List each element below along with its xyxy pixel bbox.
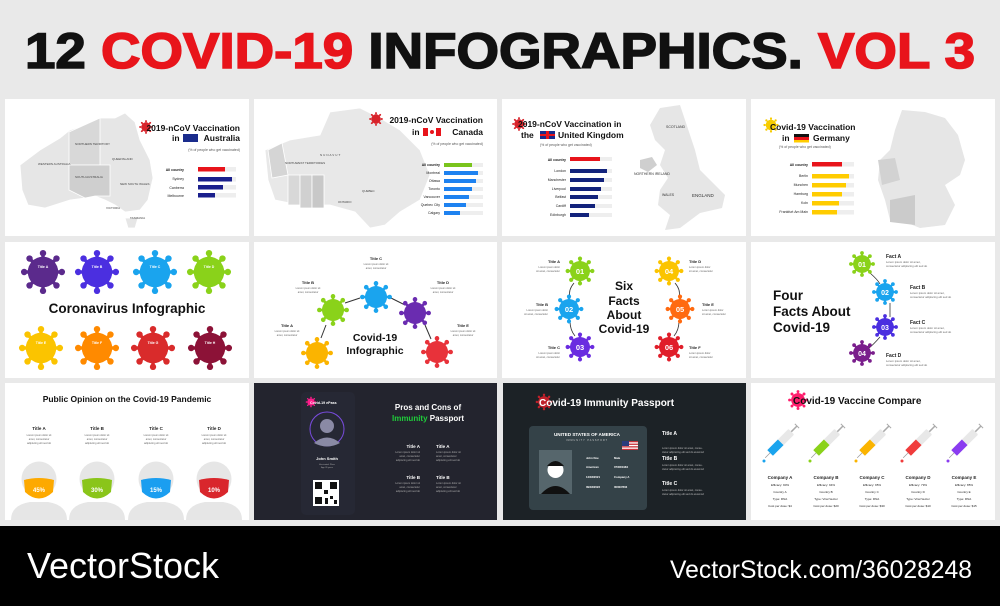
bar chart: canada: Quebec City [421,203,440,207]
panel: immunity passport: ctetur adipiscing elit sed do eiusmod [662,467,704,471]
company details: Country B [819,490,833,494]
virus row bottom: Title F [92,341,103,345]
heading: four facts [773,288,851,335]
panel: germany [751,99,995,236]
panel: public opinion: Title A [32,426,46,431]
bar chart: canada: All country [422,163,440,167]
heading: four facts: Four [773,288,804,303]
heading: canada: in [412,127,420,137]
bar chart: uk: Cardiff [556,204,566,208]
connectors [321,298,431,339]
virus numbers: 04 [858,351,866,358]
bar chart: germany: Munchen [794,183,808,187]
bar chart: australia: Canberra [169,186,184,190]
heading: australia: 2019-nCoV Vaccination [146,123,240,133]
heading: canada: 2019-nCoV Vaccination [389,115,483,125]
panel: six facts: sit amet, consectetur [689,269,713,273]
virus numbers: 03 [881,325,889,332]
panel: four facts: consectetur adipiscing elit sed do [886,264,928,268]
virus numbers: 04 [665,267,674,276]
panel: pros and cons: amet, consectetur [399,454,420,458]
virus row top: Title D [204,265,215,269]
virus numbers: 01 [576,267,584,276]
panel: immunity passport: Lorem ipsum dolor sit amet, conse- [662,463,703,467]
bar chart: australia: Sydney [172,177,184,181]
panel: four facts: Lorem ipsum dolor sit amet, [910,326,945,330]
heading: coronavirus infographic: Coronavirus Infographic [49,301,206,316]
panel: public opinion: adipiscing elit sed do [85,441,110,445]
panel: six facts: Title E [702,302,714,307]
company details [768,475,977,508]
bar chart: canada: Toronto [428,187,440,191]
panel: immunity passport: Title C [662,481,678,487]
labels: Title B [302,280,314,285]
heading: six facts: Covid-19 [599,322,650,336]
panel: covid-19 infographic arc: Lorem ipsum dolor sit [296,286,321,290]
panel: covid-19 infographic arc: amet, consectetur [298,290,318,294]
heading: uk: United Kingdom [558,130,624,140]
panel: united kingdom [502,99,746,236]
panel: four facts: consectetur adipiscing elit sed do [910,295,952,299]
panel: four facts: Lorem ipsum dolor sit amet, [910,291,945,295]
panel: covid-19 infographic arc: Lorem ipsum dolor sit [431,286,456,290]
panel: public opinion [5,383,249,520]
company details: Cost per dose: $4 [768,504,792,508]
panel: immunity passport: ctetur adipiscing elit sed do eiusmod [662,492,704,496]
panel: four facts: Fact C [910,320,926,326]
virus row bottom: Title E [36,341,47,345]
virus row top: Title C [150,265,161,269]
virus numbers: 02 [565,305,573,314]
company details: Country D [911,490,926,494]
heading: immunity passport: Covid-19 Immunity Passport [539,398,675,409]
panel: four facts [751,242,995,378]
company details: Type: Viral Vector [814,497,838,501]
company details: Country A [773,490,787,494]
heading: uk: the [521,130,534,140]
virus numbers: 01 [858,262,866,269]
panel: pros and cons: amet, consectetur [436,485,457,489]
company details: Company E [952,475,976,480]
panel: public opinion: Lorem ipsum dolor sit [144,433,169,437]
panel: canada: NUNAVUT [320,153,341,157]
panel: four facts: Lorem ipsum dolor sit amet, [886,260,921,264]
panel: pros and cons: Lorem ipsum dolor sit [395,481,420,485]
masked heads: 10% [208,488,221,494]
panel: four facts: Fact D [886,353,902,359]
panel: covid-19 infographic arc: Lorem ipsum dolor sit [451,329,476,333]
panel: six facts: sit amet, consectetur [689,355,713,359]
panel: australia: VICTORIA [106,206,120,210]
card: usa passport: 14/03/2021 [586,475,600,479]
bar chart: germany [779,162,854,214]
panel: pros and cons: amet, consectetur [436,454,457,458]
masked heads: 30% [91,488,104,494]
company details: Type: Viral Vector [906,497,930,501]
panel: covid-19 infographic arc: amet, consectetur [366,266,386,270]
heading: germany: (% of people who get vaccinated) [779,145,831,149]
panel: pros and cons [254,383,497,520]
bar chart: canada: Vancouver [424,195,441,199]
heading: six facts: Six [615,279,633,293]
company details: Type: RNA [865,497,879,501]
panel: covid-19 infographic arc: amet, consectetur [277,333,297,337]
panel: australia [5,99,249,236]
map: australia [20,113,153,228]
bar chart: germany: Berlin [799,174,808,178]
virus numbers: 03 [576,343,584,352]
bar chart: canada: Ottawa [429,179,440,183]
panel: public opinion: amet, consectetur [87,437,107,441]
panel: six facts: Title B [536,302,548,307]
panel: four facts: Fact B [910,285,926,291]
footer brand: VectorStock [27,545,220,586]
card: usa passport: Male [614,456,621,460]
panel: four facts: Lorem ipsum dolor sit amet, [886,359,921,363]
panel: immunity passport: Title A [662,431,677,437]
panel: six facts: sit amet, consectetur [702,312,726,316]
heading: public opinion: Public Opinion on the Covid-19 Pandemic [43,394,212,404]
panel: united kingdom: SCOTLAND [666,125,686,129]
panel: pros and cons: adipiscing elit sed do [436,458,461,462]
footer bar [0,526,1000,606]
panel: public opinion: Title B [90,426,105,431]
bar chart: uk: London [554,169,566,173]
masked heads: 45% [33,488,46,494]
panel: pros and cons: adipiscing elit sed do [396,458,421,462]
bar chart: canada: Montreal [426,171,440,175]
panel: six facts: Lorem ipsum dolor [689,265,711,269]
panel: pros and cons: Title B [406,475,421,480]
bar chart: australia: Melbourne [167,194,184,198]
bar chart: germany: Koln [801,201,808,205]
panel: covid-19 infographic arc: amet, consectetur [433,290,453,294]
company details: Cost per dose: $10 [905,504,931,508]
masked heads: 15% [150,488,163,494]
panel: australia: WESTERN AUSTRALIA [38,162,70,166]
heading: australia: (% of people who get vaccinated) [188,148,240,152]
heading: germany: in [782,133,790,143]
masked heads [11,462,242,520]
bar chart: uk: Liverpool [552,187,566,191]
heading: pros and cons: Pros and Cons of [395,403,461,412]
heading: uk: 2019-nCoV Vaccination in [518,119,621,129]
labels: Title E [457,323,469,328]
panel: public opinion: Title C [149,426,164,431]
panel: pros and cons: Lorem ipsum dolor sit [436,450,461,454]
panel: public opinion: amet, consectetur [146,437,166,441]
company details: Company C [859,475,885,480]
heading: vaccine compare [788,390,922,410]
card: usa passport: 0000/7803 [614,485,628,489]
panel: covid-19 infographic arc: Lorem ipsum dolor sit [275,329,300,333]
heading: covid-19 infographic: Covid-19 [353,332,397,344]
card: usa passport: 09/03/2022 [586,485,600,489]
panel: australia: NEW SOUTH WALES [120,182,150,186]
panel: four facts: consectetur adipiscing elit sed do [910,330,952,334]
panel: public opinion: adipiscing elit sed do [202,441,227,445]
company details: Company A [768,475,793,480]
virus row top: Title A [38,265,49,269]
panel: six facts: sit amet, consectetur [536,269,560,273]
card: epass: John Smith [316,456,338,461]
panel: six facts: Lorem ipsum dolor [539,351,560,355]
heading: australia [139,120,240,152]
heading: six facts: Facts [608,294,640,308]
panel: united kingdom: WALES [662,193,675,197]
panel: canada: NORTHWEST TERRITORIES [285,161,325,165]
panel: australia: NORTHERN TERRITORY [75,142,110,146]
heading: germany [763,117,856,149]
heading: vaccine compare: Covid-19 Vaccine Compare [793,396,922,407]
virus numbers: 06 [665,343,673,352]
company details: Efficacy: 94% [817,483,835,487]
card: usa passport: IMMUNITY PASSPORT [566,439,608,442]
panel: covid-19 infographic arc: amet, consectetur [453,333,473,337]
panel: public opinion: adipiscing elit sed do [27,441,52,445]
panel: public opinion: Lorem ipsum dolor sit [85,433,110,437]
card: usa passport: 07/06/1984 [614,465,628,469]
card: epass: Covid-19 ePass [310,401,337,405]
labels: Title D [437,280,449,285]
panel: pros and cons: Title A [406,444,421,449]
card: usa passport [529,426,647,510]
card: usa passport: UNITED STATES OF AMERICA [554,432,621,437]
panel: covid-19 infographic arc [254,242,497,378]
panel: immunity passport: Title B [662,456,678,462]
heading: immunity passport [536,394,675,410]
panel: public opinion: Lorem ipsum dolor sit [27,433,52,437]
heading: australia: Australia [204,133,240,143]
panel: australia: TASMANIA [130,216,145,220]
panel: six facts: Title C [548,345,560,350]
panel: immunity passport: Lorem ipsum dolor sit amet, conse- [662,488,703,492]
bar chart: germany: Hamburg [794,192,808,196]
panel: public opinion: amet, consectetur [204,437,224,441]
panel: four facts: Fact A [886,254,901,260]
company details: Efficacy: 95% [863,483,881,487]
panel: coronavirus infographic [5,242,249,378]
panel: immunity passport: Lorem ipsum dolor sit amet, conse- [662,446,703,450]
virus numbers: 05 [676,305,684,314]
panel: pros and cons: Lorem ipsum dolor sit [436,481,461,485]
panel: six facts: Title D [689,259,701,264]
panel: six facts: Lorem ipsum dolor [702,308,724,312]
card: epass [301,392,355,515]
bar chart: australia: All country [166,168,184,172]
bar chart: uk [548,157,612,217]
heading: four facts: Facts About [773,304,851,319]
company details: Efficacy: 79% [909,483,927,487]
panel: pros and cons: Title A [436,444,450,449]
panel: six facts: sit amet, consectetur [524,312,548,316]
company details: Company B [813,475,839,480]
panel: four facts: consectetur adipiscing elit sed do [886,363,928,367]
panel: australia: SOUTH AUSTRALIA [75,175,103,179]
virus row bottom: Title H [205,341,216,345]
virus nodes [301,281,453,369]
panel: six facts: Lorem ipsum dolor [527,308,548,312]
panel: covid-19 infographic arc: Lorem ipsum dolor sit [364,262,389,266]
panel: pros and cons: amet, consectetur [399,485,420,489]
bar chart: uk: All country [548,158,566,162]
heading: germany: Covid-19 Vaccination [770,122,856,132]
virus numbers [555,257,694,361]
bar chart: germany: Frankfurt Am Main [779,210,808,214]
company details: Cost per dose: $30 [859,504,885,508]
heading: uk [512,117,624,147]
panel: pros and cons: adipiscing elit sed do [436,489,461,493]
company details: Efficacy: 90% [771,483,789,487]
panel: australia: QUEENSLAND [112,157,134,161]
panel: united kingdom: NORTHERN IRELAND [634,172,670,176]
labels: Title C [370,256,382,261]
labels [281,256,469,328]
heading: germany: Germany [813,133,850,143]
map: germany [878,110,965,228]
company details: Company D [905,475,931,480]
panel: six facts: Title A [548,259,560,264]
panel: six facts: sit amet, consectetur [536,355,560,359]
bar chart: canada: Calgary [428,211,440,215]
labels: Title A [281,323,293,328]
bar chart: canada [421,163,483,215]
virus numbers [849,251,898,366]
map: canada [265,108,430,228]
company details: Type: RNA [957,497,971,501]
panel: public opinion: Title D [207,426,222,431]
virus row top [21,250,231,294]
bar chart: germany: All country [790,163,808,167]
panel: canada: QUEBEC [362,189,376,193]
panel: six facts: Lorem ipsum dolor [539,265,560,269]
company details: Cost per dose: $20 [813,504,839,508]
title: 12 COVID-19 INFOGRAPHICS. VOL 3 [25,23,975,79]
virus row top: Title B [92,265,103,269]
company details: Efficacy: 85% [955,483,973,487]
bar chart: uk: Belfast [555,195,566,199]
company details: Cost per dose: $15 [951,504,977,508]
heading: uk: (% of people who get vaccinated) [540,143,592,147]
panel: six facts: Title F [689,345,701,350]
panel: public opinion: Lorem ipsum dolor sit [202,433,227,437]
panel: covid-19 infographic arc: Infographic [346,345,404,357]
panel: pros and cons: Title B [436,475,450,480]
card: epass: Age 39 years [321,466,333,469]
bar chart: uk: Manchester [548,178,567,182]
panel: six facts [502,242,746,378]
panel: united kingdom: ENGLAND [692,193,715,198]
virus numbers: 02 [881,290,889,297]
panel: public opinion: amet, consectetur [29,437,49,441]
map: uk [640,105,725,230]
card: epass: Vaccinated: Pfizer [319,463,335,466]
syringes [762,423,984,462]
company details: Country E [957,490,971,494]
card: usa passport: American [586,465,599,469]
panel: public opinion: adipiscing elit sed do [144,441,169,445]
panel: six facts: Lorem ipsum dolor [689,351,711,355]
virus row bottom: Title G [148,341,159,345]
panel: pros and cons: adipiscing elit sed do [396,489,421,493]
panel: pros and cons: Immunity Passport [392,414,464,423]
card: usa passport: Company A [614,475,629,479]
bar chart: uk: Edinburgh [550,213,566,217]
panel: canada [254,99,497,236]
panel: immunity passport [503,383,746,520]
bar chart: australia [166,167,236,198]
company details: Country C [865,490,880,494]
heading: six facts: About [607,308,641,322]
company details: Type: RNA [773,497,787,501]
panel: immunity passport: ctetur adipiscing elit sed do eiusmod [662,450,704,454]
heading: canada: Canada [452,127,483,137]
heading: canada: (% of people who get vaccinated) [431,142,483,146]
card: usa passport: John Doe [586,456,599,460]
heading: six facts [599,279,650,336]
footer url: VectorStock.com/36028248 [670,556,972,584]
heading: australia: in [172,133,180,143]
heading: four facts: Covid-19 [773,320,830,335]
heading: canada [369,112,483,146]
panel: pros and cons: Lorem ipsum dolor sit [395,450,420,454]
virus row bottom [19,326,232,370]
panel: vaccine compare [751,383,995,520]
panel: canada: ONTARIO [338,200,352,204]
